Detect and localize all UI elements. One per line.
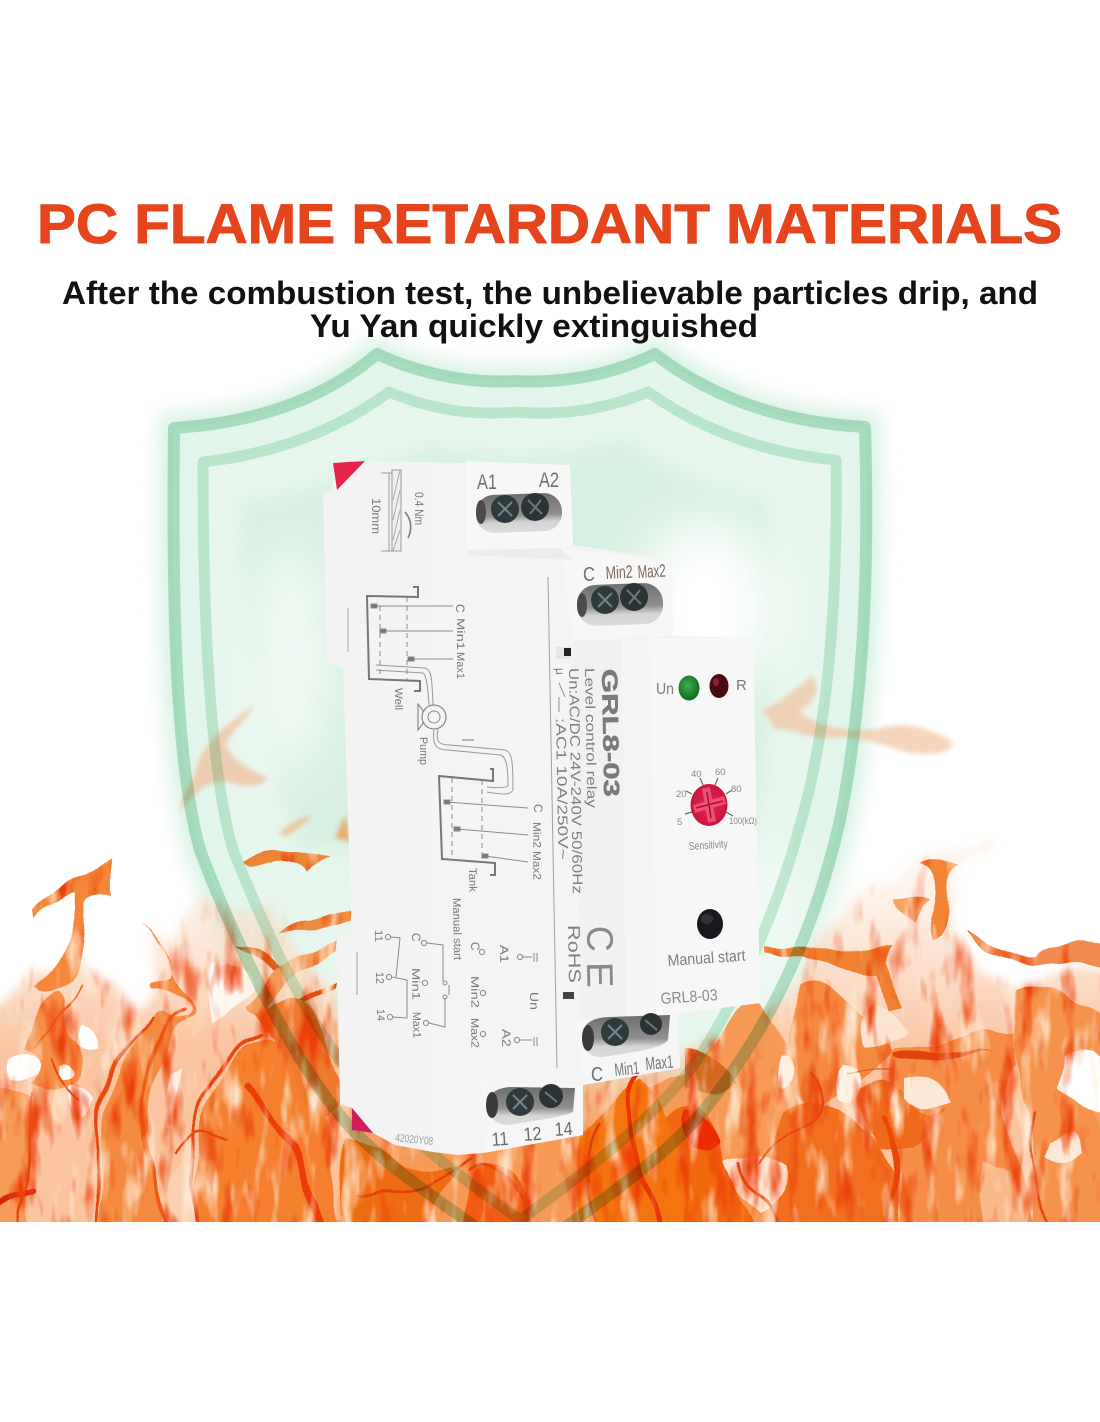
side print: wiring diagram: 14 bbox=[374, 1009, 386, 1021]
label: product info: GRL8-03 bbox=[597, 669, 624, 797]
front panel: manual start button bbox=[667, 909, 747, 970]
terminal C Min2 Max2 bbox=[576, 561, 666, 626]
front panel: sensitivity dial bbox=[676, 767, 757, 853]
terminal A1 A2 bbox=[475, 469, 563, 533]
flames: upper pale wisps bbox=[180, 676, 952, 842]
CE mark bbox=[579, 925, 620, 988]
CE mark: C bbox=[579, 925, 620, 952]
side print: well and pump diagram: Min1 bbox=[454, 618, 466, 650]
side print: wiring diagram: Min1 bbox=[409, 968, 422, 1000]
side print: wiring diagram: A2 bbox=[499, 1029, 513, 1047]
pale flame silhouette bbox=[0, 842, 1100, 1260]
terminal C Min2 Max2: C bbox=[583, 564, 595, 586]
label: product info: μ bbox=[553, 668, 567, 675]
label: product info: :AC1 10A/250V~ bbox=[553, 718, 571, 860]
device body bbox=[323, 461, 760, 1155]
terminal C Min1 Max1: Min1 bbox=[614, 1058, 640, 1080]
side print: model code: 42020Y08 bbox=[395, 1132, 434, 1148]
front panel: sensitivity dial: Sensitivity bbox=[688, 838, 728, 853]
orange wisps near shield bbox=[245, 854, 327, 870]
side print: well and pump diagram: Pump bbox=[417, 737, 429, 765]
side print: wiring diagram: 12 bbox=[373, 972, 385, 984]
divider bbox=[548, 577, 557, 1068]
front panel: indicator LEDs: Un bbox=[656, 681, 674, 698]
label: product info bbox=[553, 668, 624, 983]
side print: wiring diagram: A1 bbox=[497, 945, 511, 963]
CE mark: E bbox=[579, 961, 620, 988]
right flame: stem and tips bbox=[920, 859, 958, 940]
fire base glow bbox=[334, 1043, 706, 1222]
side print: wiring diagram: 11 bbox=[372, 930, 384, 942]
terminal C Min2 Max2: Min2 bbox=[605, 562, 633, 583]
front panel: indicator LEDs bbox=[656, 674, 747, 700]
title: PC FLAME RETARDANT MATERIALS bbox=[37, 192, 1062, 255]
side print: tank diagram: Tank bbox=[466, 868, 478, 893]
label: product info: RoHS bbox=[564, 925, 584, 983]
terminal A1 A2: A2 bbox=[539, 469, 559, 492]
relay device bbox=[323, 461, 760, 1155]
dark flame veins bbox=[0, 985, 1050, 1240]
terminal C Min1 Max1: C bbox=[591, 1064, 603, 1086]
side print: torque diagram bbox=[369, 470, 424, 551]
front panel: sensitivity dial: 20 bbox=[676, 789, 687, 800]
side print: wiring diagram: Min2 bbox=[468, 976, 481, 1008]
front panel: sensitivity dial: 60 bbox=[715, 767, 726, 778]
side print: wiring diagram: C bbox=[409, 933, 423, 942]
side print: wiring diagram: Manual start bbox=[450, 898, 463, 960]
terminal 11 12 14 bbox=[486, 1084, 575, 1151]
front panel: sensitivity dial: 5 bbox=[677, 817, 682, 828]
bottom centre flames bbox=[462, 1162, 528, 1222]
flames: main fire mass bbox=[0, 840, 1100, 1222]
left tall wisp bbox=[30, 864, 110, 990]
side print: tank diagram: Max2 bbox=[530, 851, 543, 880]
terminal A1 A2: A1 bbox=[477, 471, 497, 494]
side print: wiring diagram: C bbox=[468, 942, 482, 951]
side print: well and pump diagram: Well bbox=[392, 688, 404, 710]
shield outline bands over flames bbox=[173, 354, 866, 1260]
front panel: sensitivity dial: 40 bbox=[691, 769, 702, 780]
side notches bbox=[347, 608, 349, 652]
side print: wiring diagram: Un bbox=[527, 992, 541, 1010]
subtitle bbox=[62, 275, 1038, 344]
subtitle: Yu Yan quickly extinguished bbox=[310, 308, 758, 344]
front panel: manual start button: Manual start bbox=[667, 948, 747, 970]
infographic canvas bbox=[0, 204, 1100, 1222]
left flame columns bbox=[0, 1088, 35, 1222]
side print: well and pump diagram bbox=[367, 587, 513, 794]
terminal C Min2 Max2: Max2 bbox=[637, 561, 666, 582]
side print: tank diagram bbox=[439, 769, 545, 893]
terminal 11 12 14: 14 bbox=[554, 1119, 574, 1141]
side print: wiring diagram: Max2 bbox=[468, 1018, 481, 1048]
terminal C Min1 Max1: Max1 bbox=[645, 1052, 674, 1074]
shield background bbox=[152, 335, 888, 1087]
terminal 11 12 14: 11 bbox=[491, 1129, 509, 1151]
label: product info: Level control relay bbox=[582, 668, 599, 808]
front panel: model name: GRL8-03 bbox=[660, 987, 718, 1008]
peach highlights on right bbox=[723, 1153, 785, 1215]
front panel: sensitivity dial: 80 bbox=[731, 784, 742, 795]
label: product info: Un:AC/DC 24V-240V 50/60Hz bbox=[566, 668, 586, 894]
side print: tank diagram: C bbox=[531, 804, 545, 813]
terminal C Min1 Max1 bbox=[582, 1013, 674, 1086]
side print: wiring diagram bbox=[372, 898, 541, 1048]
side print: tank diagram: Min2 bbox=[530, 822, 542, 848]
subtitle: After the combustion test, the unbelievable particles drip, and bbox=[62, 275, 1038, 311]
front panel: indicator LEDs: R bbox=[736, 677, 747, 694]
indicator square bbox=[556, 647, 571, 659]
front panel: sensitivity dial: 100(kΩ) bbox=[729, 816, 757, 827]
side print: well and pump diagram: C bbox=[453, 604, 467, 613]
side print: wiring diagram: Max1 bbox=[410, 1012, 422, 1038]
side print: torque diagram: 10mm bbox=[369, 498, 383, 534]
side print: well and pump diagram: Max1 bbox=[454, 652, 466, 679]
side print: torque diagram: 0.4 Nm bbox=[412, 492, 424, 525]
terminal 11 12 14: 12 bbox=[523, 1124, 542, 1146]
red corner clips bbox=[333, 461, 365, 490]
left white gaps bbox=[7, 1049, 37, 1079]
